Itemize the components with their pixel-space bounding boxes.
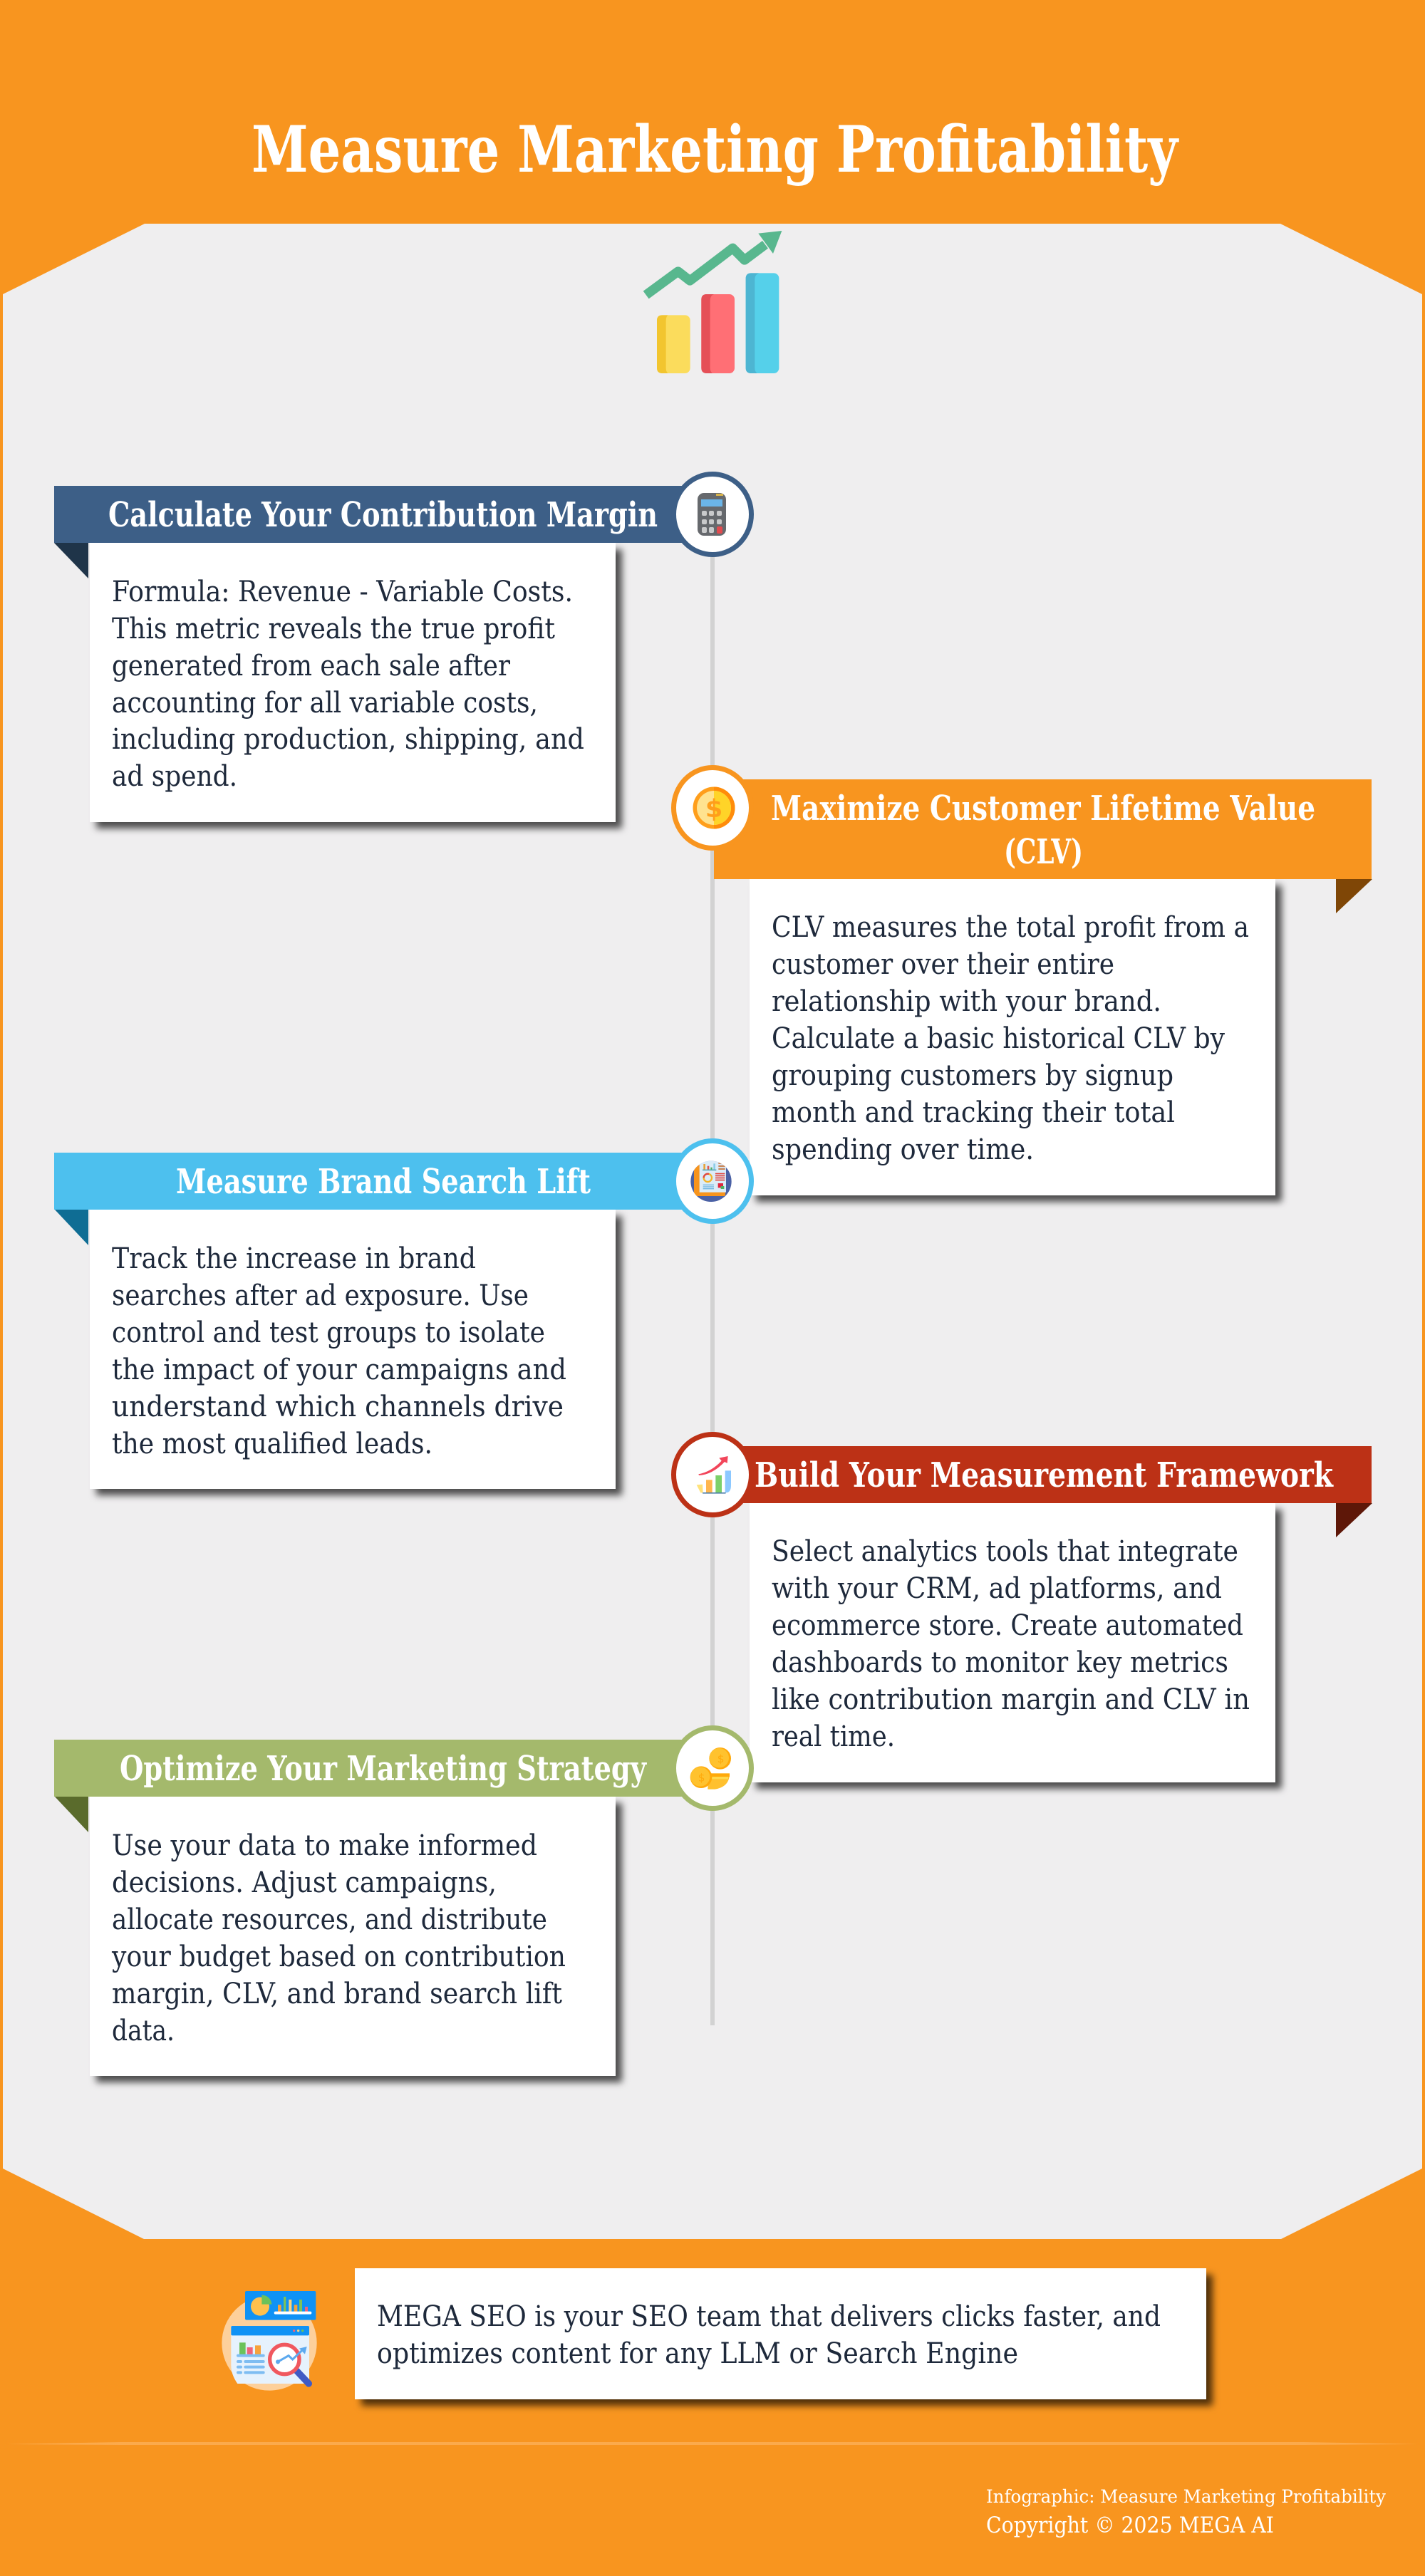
- card 2 heading bar: (CLV): [1004, 832, 1083, 872]
- footer callout: [355, 2268, 1206, 2399]
- card 4 body: like contribution margin and CLV in: [772, 1683, 1250, 1716]
- step 2: maximize customer lifetime value: [714, 779, 1372, 1195]
- card 4 heading bar: [714, 1446, 1372, 1503]
- card 1 body: ad spend.: [112, 760, 237, 793]
- card 2 body: month and tracking their total: [772, 1096, 1175, 1129]
- card 3 heading bar: Measure Brand Search Lift: [176, 1162, 591, 1202]
- card 3 body: Track the increase in brand: [112, 1242, 476, 1275]
- card 3 body: the most qualified leads.: [112, 1428, 432, 1460]
- card 4 body: real time.: [772, 1720, 895, 1753]
- card 1 body: accounting for all variable costs,: [112, 687, 538, 720]
- footer divider: [7, 2442, 1418, 2445]
- footer credits: [986, 2486, 1387, 2538]
- step 5: optimize marketing strategy: [54, 1740, 712, 2076]
- card 4 fold: [1336, 1503, 1372, 1537]
- card 4 body: with your CRM, ad platforms, and: [772, 1572, 1222, 1605]
- card 2 body: grouping customers by signup: [772, 1059, 1173, 1092]
- card 3 fold: [54, 1209, 88, 1245]
- step 1: calculate contribution margin: [54, 486, 712, 822]
- footer credits: Copyright © 2025 MEGA AI: [986, 2513, 1274, 2538]
- badge: coins: [674, 1728, 751, 1808]
- card 2 heading bar: [714, 779, 1372, 879]
- card 2 body: customer over their entire: [772, 948, 1114, 981]
- card 4 body: [750, 1503, 1275, 1782]
- icon: rising bar chart with arrow: [646, 231, 782, 373]
- content panel: [3, 224, 1422, 2239]
- card 5 body: Use your data to make informed: [112, 1829, 537, 1862]
- card 5 heading bar: Optimize Your Marketing Strategy: [120, 1749, 648, 1789]
- card 2 heading bar: Maximize Customer Lifetime Value: [771, 789, 1315, 829]
- card 3 body: searches after ad exposure. Use: [112, 1279, 529, 1312]
- card 1 heading bar: [54, 486, 712, 543]
- card 3 heading bar: [54, 1153, 712, 1210]
- card 1 heading bar: Calculate Your Contribution Margin: [108, 495, 658, 535]
- card 5 fold: [54, 1796, 88, 1832]
- badge: growth chart: [674, 1435, 751, 1515]
- card 1 body: including production, shipping, and: [112, 723, 584, 756]
- icon: coins: [690, 1747, 731, 1790]
- badge: report dashboard: [674, 1141, 751, 1221]
- timeline line: [710, 541, 715, 2025]
- card 2 body: relationship with your brand.: [772, 985, 1161, 1018]
- icon: dollar coin: $: [705, 795, 722, 824]
- card 5 body: margin, CLV, and brand search lift: [112, 1978, 562, 2010]
- card 5 body: data.: [112, 2015, 175, 2047]
- icon: coins: $: [717, 1752, 725, 1765]
- card 5 body: decisions. Adjust campaigns,: [112, 1866, 497, 1899]
- card 2 body: CLV measures the total profit from a: [772, 911, 1249, 944]
- card 4 body: dashboards to monitor key metrics: [772, 1646, 1228, 1679]
- footer callout: MEGA SEO is your SEO team that delivers clicks faster, and: [377, 2300, 1161, 2333]
- card 1 body: [90, 543, 616, 822]
- title: Measure Marketing Profitability: [252, 112, 1179, 187]
- card 5 body: [90, 1797, 616, 2076]
- footer callout: optimizes content for any LLM or Search Engine: [377, 2337, 1018, 2370]
- card 3 body: understand which channels drive: [112, 1391, 564, 1423]
- card 2 body: spending over time.: [772, 1133, 1034, 1166]
- card 2 body: Calculate a basic historical CLV by: [772, 1022, 1225, 1055]
- card 5 body: allocate resources, and distribute: [112, 1904, 547, 1936]
- icon: calculator: [698, 493, 726, 536]
- card 3 body: the impact of your campaigns and: [112, 1354, 566, 1386]
- icon: coins: $: [698, 1771, 705, 1784]
- card 2 fold: [1336, 879, 1372, 913]
- card 1 body: generated from each sale after: [112, 650, 511, 682]
- footer icon: analytics dashboard: [222, 2291, 317, 2391]
- card 3 body: control and test groups to isolate: [112, 1316, 545, 1349]
- card 4 body: Select analytics tools that integrate: [772, 1535, 1238, 1568]
- card 3 body: [90, 1210, 616, 1489]
- icon: report dashboard: [690, 1160, 732, 1202]
- badge: dollar coin: [674, 768, 751, 848]
- step 3: measure brand search lift: [54, 1153, 712, 1489]
- card 5 body: your budget based on contribution: [111, 1941, 566, 1973]
- card 1 fold: [54, 543, 88, 578]
- card 2 body: [750, 879, 1275, 1195]
- card 1 body: Formula: Revenue - Variable Costs.: [112, 576, 573, 608]
- card 1 body: This metric reveals the true profit: [112, 613, 555, 645]
- icon: growth chart: [697, 1456, 731, 1494]
- card 4 body: ecommerce store. Create automated: [772, 1609, 1243, 1642]
- badge: calculator: [674, 474, 751, 554]
- footer credits: Infographic: Measure Marketing Profitability: [986, 2486, 1387, 2507]
- step 4: build measurement framework: [714, 1446, 1372, 1782]
- card 5 heading bar: [54, 1740, 712, 1797]
